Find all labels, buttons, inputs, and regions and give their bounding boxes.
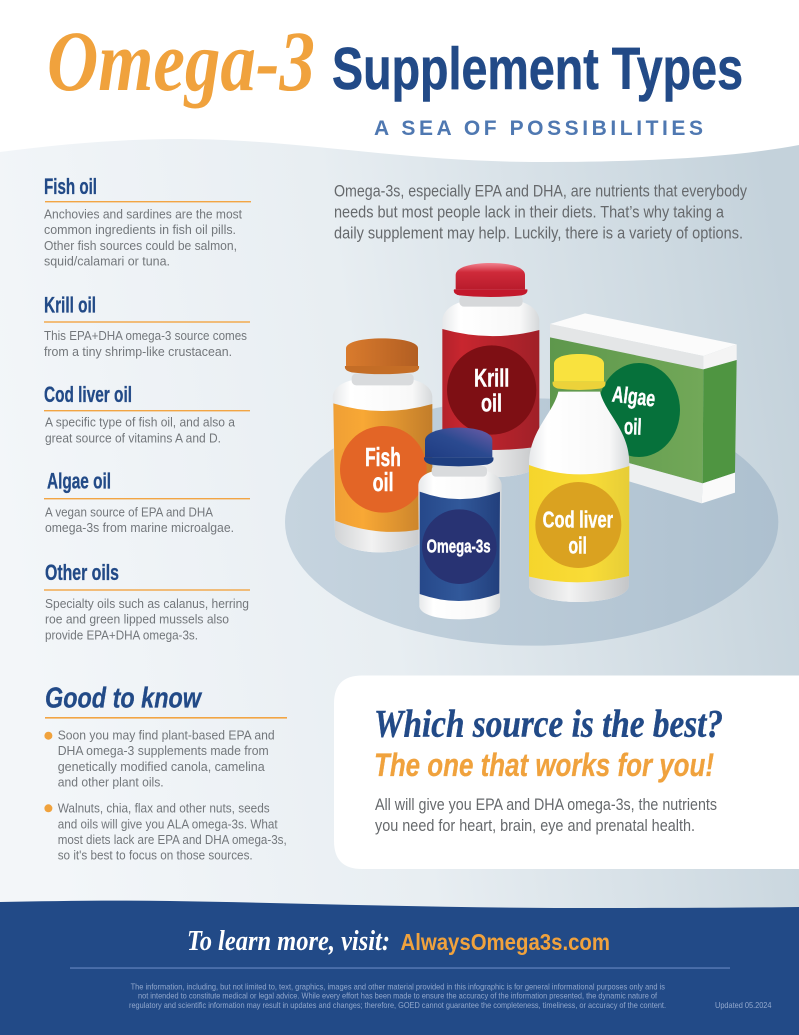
panel: good to know xyxy=(44,683,287,863)
icon: cod liver oil bottle: Cod liver xyxy=(543,506,613,532)
call to action xyxy=(187,926,610,957)
panel: oil types list xyxy=(44,174,251,642)
section: fish oil: Other fish sources could be salmon, xyxy=(44,238,237,253)
intro paragraph: Omega-3s, especially EPA and DHA, are nutrients that everybody xyxy=(334,183,748,201)
platform disc xyxy=(285,398,778,646)
icon: omega-3s bottle xyxy=(418,428,502,619)
icon: cod liver oil bottle: oil xyxy=(568,532,587,558)
section: cod liver oil: great source of vitamins A and D. xyxy=(45,431,221,446)
section: fish oil: squid/calamari or tuna. xyxy=(44,254,170,269)
body text: you need for heart, brain, eye and prenatal health. xyxy=(375,817,695,835)
updated date: Updated 05.2024 xyxy=(715,1001,772,1010)
disclaimer: The information, including, but not limited to, text, graphics, images and other material provided in this infographic is for general informational purposes only and is xyxy=(131,982,665,991)
section: cod liver oil xyxy=(44,382,250,446)
section: algae oil: omega-3s from marine microalgae. xyxy=(45,520,234,535)
section: fish oil xyxy=(44,174,251,269)
section: algae oil: A vegan source of EPA and DHA xyxy=(45,505,213,520)
disclaimer: regulatory and scientific information may result in updates and changes; therefore, GOED cannot guarantee the completeness, timeliness, or accuracy of the content. xyxy=(129,1001,666,1010)
subtitle: A SEA OF POSSIBILITIES xyxy=(374,117,703,140)
title xyxy=(47,13,743,109)
section: other oils xyxy=(44,560,250,642)
icon: algae oil box xyxy=(550,313,737,503)
bullet: ALA sources: most diets lack are EPA and DHA omega-3s, xyxy=(58,832,287,847)
icon: algae oil box: oil xyxy=(624,413,642,440)
disclaimer xyxy=(129,982,666,1010)
heading: the one that works: The one that works for you! xyxy=(374,747,714,783)
bullet: plant-based: Soon you may find plant-based EPA and xyxy=(58,727,275,742)
intro paragraph xyxy=(334,183,748,242)
section: krill oil: This EPA+DHA omega-3 source comes xyxy=(44,328,247,343)
illustration: supplement containers xyxy=(285,263,778,646)
section: other oils: Other oils xyxy=(45,560,119,585)
bullet: plant-based: genetically modified canola, camelina xyxy=(58,759,265,774)
section: algae oil xyxy=(44,469,250,535)
background wave panel xyxy=(0,139,799,910)
icon: krill oil bottle xyxy=(442,263,539,477)
section: krill oil xyxy=(44,293,250,359)
section: other oils: provide EPA+DHA omega-3s. xyxy=(45,627,198,642)
heading: which source: Which source is the best? xyxy=(374,703,723,746)
body text: All will give you EPA and DHA omega-3s, the nutrients xyxy=(375,796,717,814)
intro paragraph: daily supplement may help. Luckily, there is a variety of options. xyxy=(334,224,743,242)
call to action: AlwaysOmega3s.com xyxy=(400,929,610,955)
icon: krill oil bottle: oil xyxy=(481,390,502,418)
section: other oils: Specialty oils such as calanus, herring xyxy=(45,596,249,611)
section: cod liver oil: Cod liver oil xyxy=(44,382,132,407)
bullet: ALA sources: Walnuts, chia, flax and other nuts, seeds xyxy=(58,801,270,816)
section: fish oil: Fish oil xyxy=(44,174,97,199)
intro paragraph: needs but most people lack in their diets. That’s why taking a xyxy=(334,204,724,222)
bullet: plant-based: DHA omega-3 supplements made from xyxy=(58,743,269,758)
call to action: To learn more, visit: xyxy=(187,926,390,957)
section: fish oil: common ingredients in fish oil pills. xyxy=(44,222,236,237)
icon: algae oil box: Algae xyxy=(611,380,657,412)
section: krill oil: Krill oil xyxy=(44,293,96,318)
icon: fish oil bottle xyxy=(333,338,432,552)
panel: which source is best xyxy=(334,676,799,869)
icon: fish oil bottle: oil xyxy=(373,467,394,497)
bullet: ALA sources xyxy=(44,801,287,863)
section: algae oil: Algae oil xyxy=(47,469,111,494)
icon: omega-3s bottle: Omega-3s xyxy=(427,536,491,557)
bullet: ALA sources: so it's best to focus on those sources. xyxy=(58,848,253,863)
disclaimer: not intended to constitute medical or legal advice. While every effort has been made to ensure the accuracy of the information presented, the dynamic nature of xyxy=(138,992,658,1001)
section: fish oil: Anchovies and sardines are the most xyxy=(44,206,242,221)
heading: good to know: Good to know xyxy=(45,683,203,715)
section: other oils: roe and green lipped mussels also xyxy=(45,612,229,627)
icon: cod liver oil bottle xyxy=(529,354,629,602)
bullet: plant-based: and other plant oils. xyxy=(58,775,164,790)
bullet: ALA sources: and oils will give you ALA omega-3s. What xyxy=(58,816,278,831)
footer band xyxy=(0,901,799,1035)
bullet: plant-based xyxy=(44,727,275,790)
icon: fish oil bottle: Fish xyxy=(365,442,401,472)
icon: krill oil bottle: Krill xyxy=(474,365,509,393)
section: cod liver oil: A specific type of fish oil, and also a xyxy=(45,415,236,430)
body text xyxy=(375,796,717,835)
section: krill oil: from a tiny shrimp-like crustacean. xyxy=(44,344,232,359)
title: Omega-3 script: Omega-3 xyxy=(47,13,315,109)
